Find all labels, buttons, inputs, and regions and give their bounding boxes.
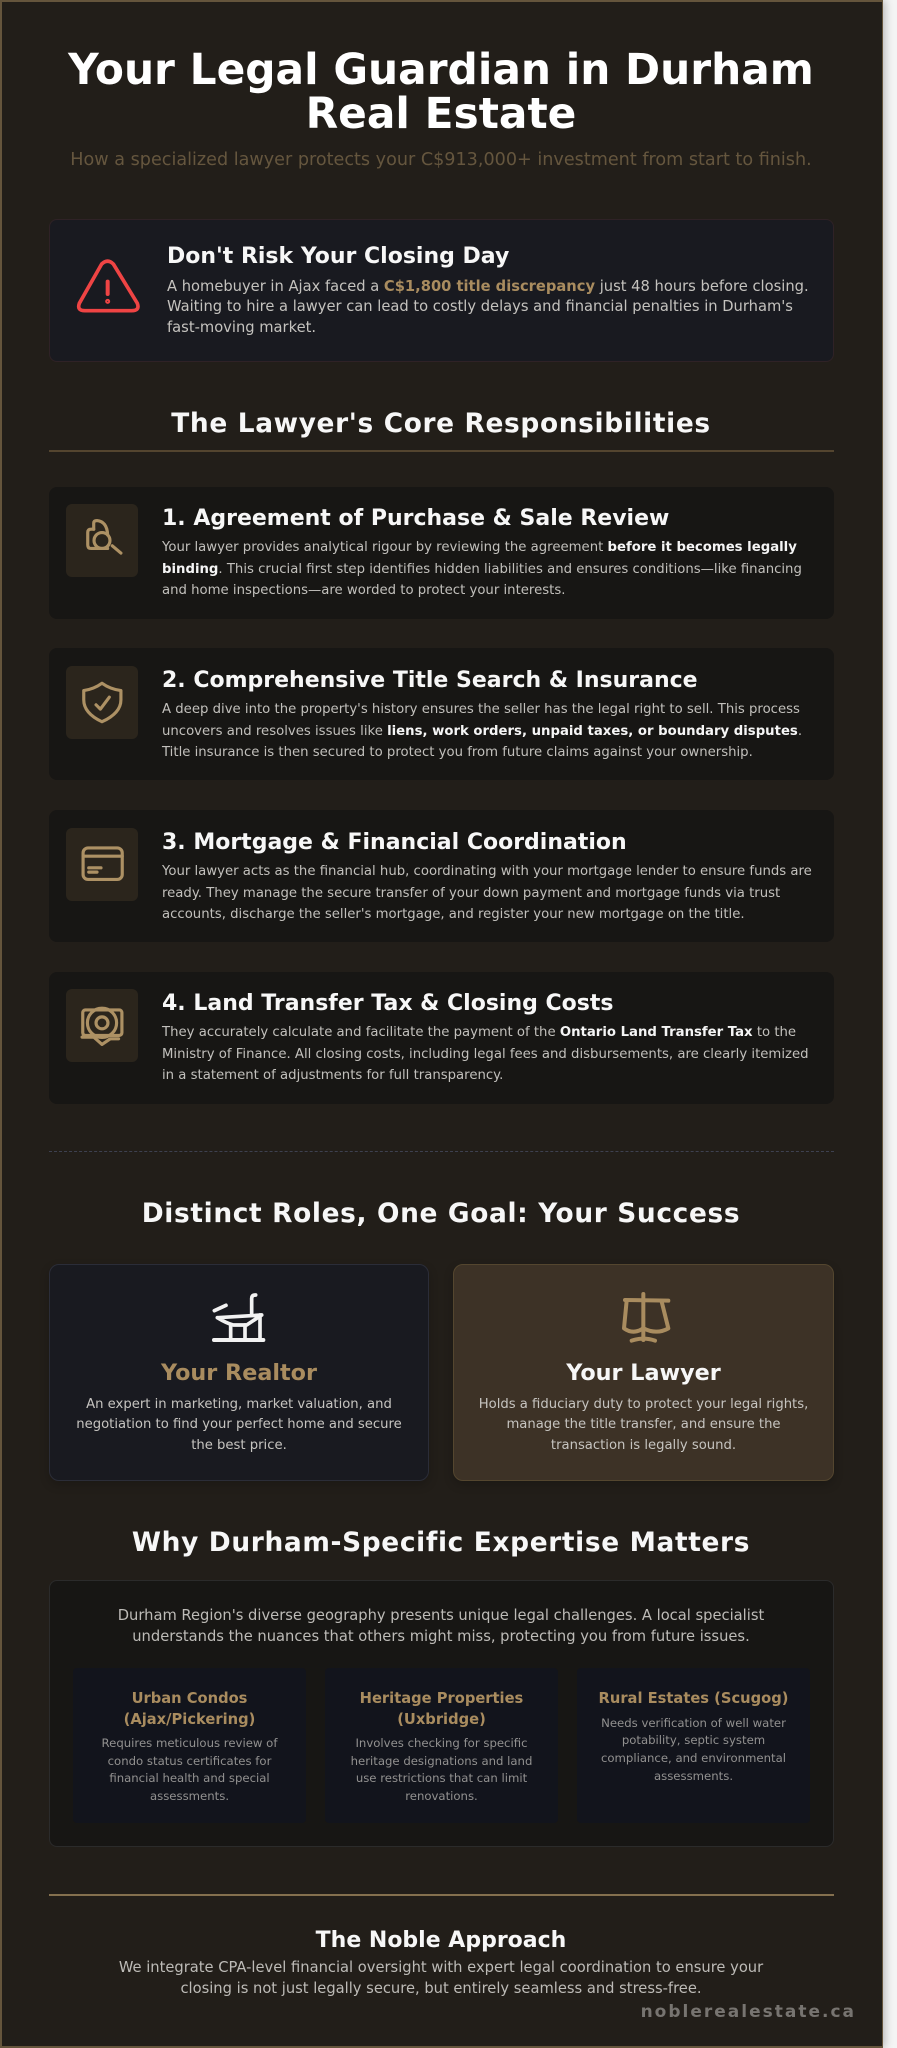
responsibility 4 text — [162, 1025, 809, 1083]
panel: responsibility 2 — [49, 648, 834, 780]
heritage text: Involves checking for specific — [355, 1736, 528, 1750]
responsibility 4 text: in a statement of adjustments for full transparency. — [162, 1068, 503, 1083]
responsibility 4 text: They accurately calculate and facilitate the payment of the Ontario Land Transfer Tax to the — [162, 1025, 796, 1040]
rural text: compliance, and environmental — [601, 1751, 786, 1765]
responsibility 1 text: binding. This crucial first step identifies hidden liabilities and ensures conditions—like financing — [162, 562, 802, 577]
urban condos text: financial health and special — [109, 1771, 270, 1785]
subtitle: How a specialized lawyer protects your C$913,000+ investment from start to finish. — [70, 150, 812, 170]
responsibility 3 text: accounts, discharge the seller's mortgage, and register your new mortgage on the title. — [162, 907, 745, 922]
noble approach heading: The Noble Approach — [316, 1928, 566, 1952]
title: Your Legal Guardian in Durham — [68, 45, 814, 94]
lawyer text: manage the title transfer, and ensure the — [506, 1417, 781, 1432]
rural text: potability, septic system — [622, 1733, 765, 1747]
alert text — [167, 278, 809, 336]
urban condos text — [102, 1736, 278, 1803]
noble approach text: We integrate CPA-level financial oversight with expert legal coordination to ensure your — [119, 1959, 763, 1976]
panel: lawyer — [453, 1264, 834, 1481]
responsibility 2 text: uncovers and resolves issues like liens, work orders, unpaid taxes, or boundary disputes. — [162, 724, 802, 739]
urban condos title: Urban Condos — [132, 1690, 247, 1707]
lawyer title: Your Lawyer — [566, 1360, 721, 1386]
responsibility 4 title: 4. Land Transfer Tax & Closing Costs — [162, 990, 613, 1016]
responsibility 2 text — [162, 702, 802, 760]
icon: warning triangle — [76, 259, 140, 312]
responsibility 1 text — [162, 540, 802, 598]
title — [68, 45, 814, 138]
responsibility 1 text: Your lawyer provides analytical rigour by reviewing the agreement before it becomes legally — [162, 540, 797, 555]
responsibility 3 title: 3. Mortgage & Financial Coordination — [162, 830, 627, 854]
alert text: Waiting to hire a lawyer can lead to costly delays and financial penalties in Durham's — [167, 298, 793, 315]
responsibility 3 text: Your lawyer acts as the financial hub, coordinating with your mortgage lender to ensure funds are — [162, 864, 812, 879]
heritage title: Heritage Properties — [360, 1690, 523, 1707]
alert heading: Don't Risk Your Closing Day — [167, 244, 509, 269]
rural title: Rural Estates (Scugog) — [599, 1690, 788, 1707]
divider: gold — [49, 1894, 834, 1896]
alert text: A homebuyer in Ajax faced a C$1,800 title discrepancy just 48 hours before closing. — [167, 278, 809, 295]
realtor text: the best price. — [191, 1438, 287, 1452]
heading: durham expertise: Why Durham-Specific Expertise Matters — [132, 1527, 750, 1558]
lawyer text: Holds a fiduciary duty to protect your legal rights, — [479, 1396, 808, 1412]
panel: closing day alert — [49, 219, 834, 362]
rural text — [601, 1716, 786, 1783]
panel: responsibility 1 — [49, 487, 834, 619]
expertise intro: Durham Region's diverse geography presents unique legal challenges. A local specialist — [118, 1607, 764, 1624]
divider — [49, 450, 834, 452]
responsibility 4 text: Ministry of Finance. All closing costs, including legal fees and disbursements, are clearly itemized — [162, 1047, 809, 1062]
card: rural estates — [577, 1668, 810, 1823]
realtor text: An expert in marketing, market valuation, and — [86, 1396, 392, 1412]
responsibility 2 title: 2. Comprehensive Title Search & Insurance — [162, 668, 698, 692]
heritage text: renovations. — [405, 1789, 478, 1803]
heritage title: (Uxbridge) — [397, 1711, 486, 1728]
card: heritage properties — [325, 1668, 558, 1823]
dashed divider — [49, 1151, 834, 1152]
panel: responsibility 4 — [49, 972, 834, 1104]
panel: responsibility 3 — [49, 810, 834, 942]
rural text: assessments. — [654, 1769, 733, 1783]
responsibility 3 text — [162, 864, 812, 922]
heritage text: use restrictions that can limit — [356, 1771, 527, 1785]
heritage text: heritage designations and land — [351, 1754, 532, 1768]
realtor text: negotiation to find your perfect home and secure — [76, 1417, 402, 1432]
icon: credit card — [66, 828, 138, 901]
icon: scales of justice — [622, 1292, 670, 1343]
heading: distinct roles: Distinct Roles, One Goal: Your Success — [142, 1198, 740, 1229]
heading: core responsibilities: The Lawyer's Core Responsibilities — [171, 408, 711, 439]
icon: shield check — [66, 666, 138, 739]
expertise intro — [118, 1607, 764, 1644]
realtor text — [76, 1396, 402, 1452]
urban condos text: condo status certificates for — [108, 1754, 271, 1768]
realtor title: Your Realtor — [161, 1360, 317, 1386]
title: Real Estate — [306, 89, 576, 138]
icon: realtor — [212, 1293, 266, 1342]
noble approach text: closing is not just legally secure, but entirely seamless and stress-free. — [180, 1980, 702, 1997]
icon: document search — [66, 504, 138, 577]
urban condos text: Requires meticulous review of — [102, 1736, 277, 1750]
responsibility 1 title: 1. Agreement of Purchase & Sale Review — [162, 506, 669, 530]
lawyer text — [479, 1396, 808, 1452]
card: urban condos — [73, 1668, 306, 1823]
noble approach text — [119, 1959, 764, 1997]
responsibility 1 text: and home inspections—are worded to protect your interests. — [162, 583, 565, 598]
urban condos title — [124, 1690, 255, 1728]
urban condos title: (Ajax/Pickering) — [124, 1711, 255, 1728]
rural text: Needs verification of well water — [601, 1716, 786, 1730]
responsibility 2 text: A deep dive into the property's history ensures the seller has the legal right to sell. This process — [162, 702, 800, 717]
lawyer text: transaction is legally sound. — [551, 1438, 736, 1452]
heritage title — [360, 1690, 523, 1728]
alert text: fast-moving market. — [167, 319, 316, 336]
watermark: noblerealestate.ca — [641, 2002, 856, 2022]
icon: banknote — [66, 989, 138, 1062]
panel: realtor — [49, 1264, 429, 1481]
panel: durham expertise — [49, 1580, 834, 1847]
responsibility 2 text: Title insurance is then secured to protect you from future claims against your ownership. — [162, 745, 753, 760]
responsibility 3 text: ready. They manage the secure transfer of your down payment and mortgage funds via trust — [162, 886, 780, 901]
heritage text — [351, 1736, 532, 1803]
expertise intro: understands the nuances that others might miss, protecting you from future issues. — [132, 1628, 750, 1644]
urban condos text: assessments. — [150, 1789, 229, 1803]
